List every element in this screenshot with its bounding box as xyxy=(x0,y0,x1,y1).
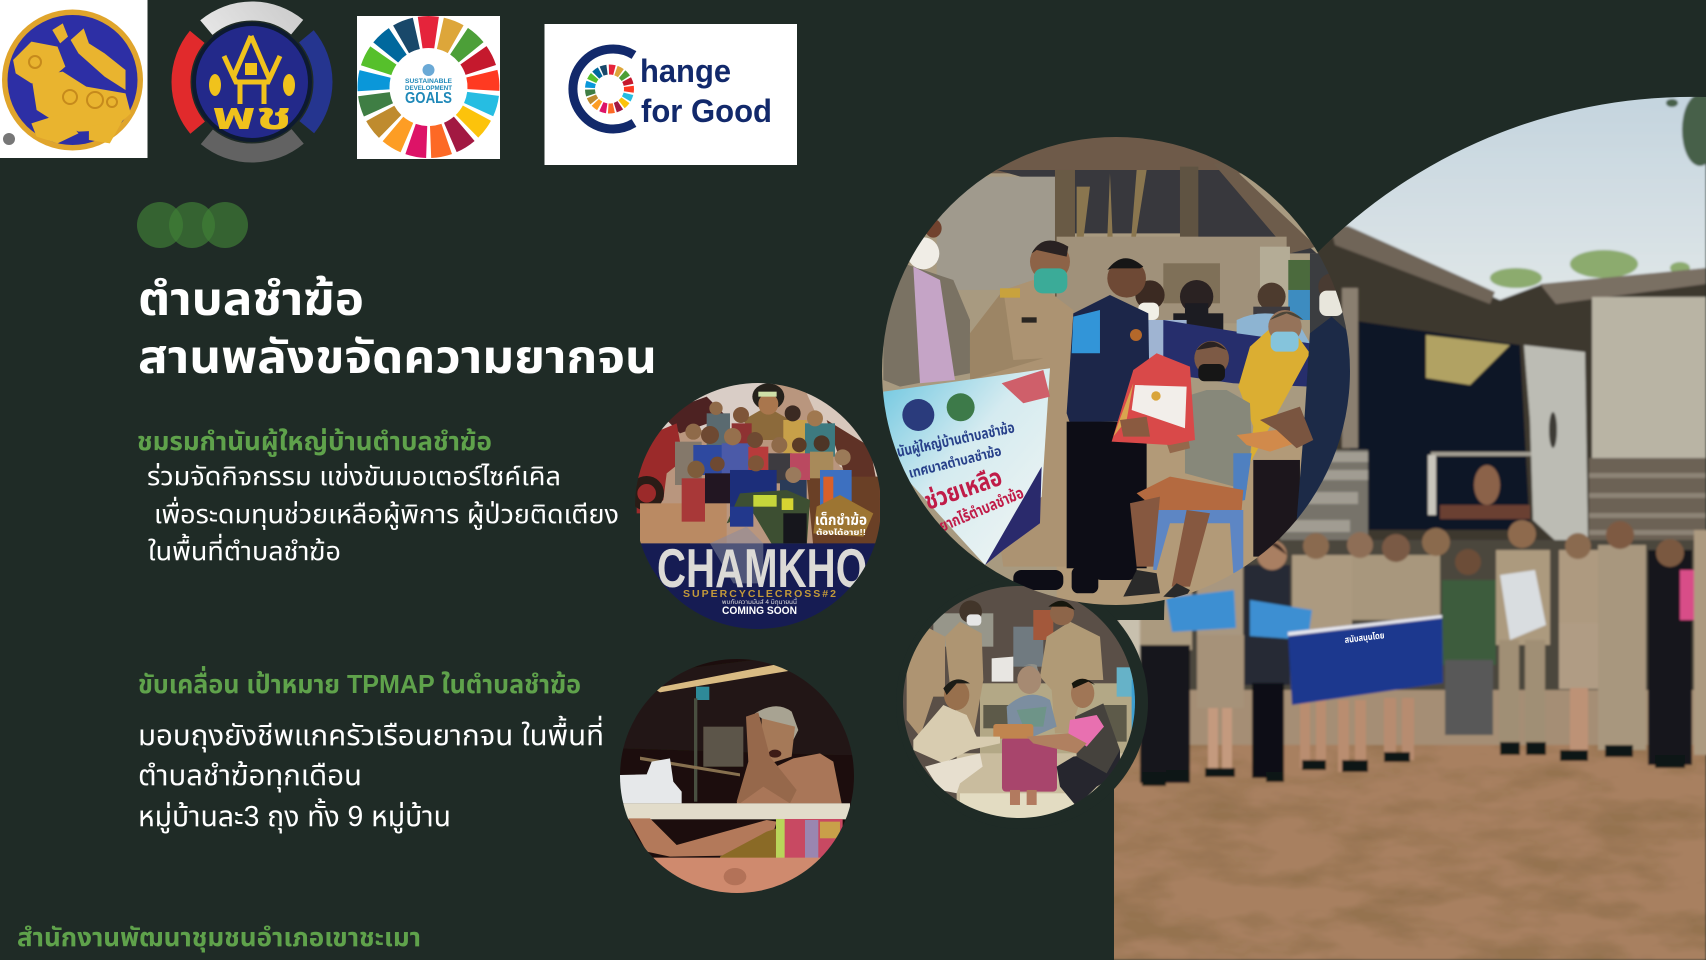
section 2 body text xyxy=(138,715,604,834)
photo: handing over food bag to seated villager: นันผู้ใหญ่บ้านตำบลชำฆ้อ xyxy=(895,418,1016,462)
logo: community development department: พช xyxy=(212,96,292,138)
three overlapping green circles xyxy=(137,202,248,248)
photo: large group of officials in front of the house: สนับสนุนโดย xyxy=(1344,630,1385,645)
photo: large group of officials in front of the house xyxy=(1100,80,1706,960)
logo: community development department xyxy=(152,0,352,182)
tree foliage top right xyxy=(1666,94,1706,166)
section 2 body text: มอบถุงยังชีพแกครัวเรือนยากจน ในพื้นที่ xyxy=(138,715,604,752)
section 1 body text: ในพื้นที่ตำบลชำฆ้อ xyxy=(148,533,341,566)
photo: motorcycle event poster: CHAMKHO xyxy=(657,537,867,599)
blue hand signs xyxy=(1166,590,1236,632)
photo: motorcycle event poster: พบกับความมันส์ 4 มิถุนายนนี้ xyxy=(722,597,797,607)
title: ตำบลชำฆ้อ xyxy=(138,273,364,325)
section 2 heading: ขับเคลื่อน เป้าหมาย TPMAP ในตำบลชำฆ้อ xyxy=(138,666,581,699)
section 1 body text xyxy=(147,461,619,566)
title xyxy=(138,273,657,383)
section 1 heading: ชมรมกำนันผู้ใหญ่บ้านตำบลชำฆ้อ xyxy=(137,426,492,457)
section 1 body text: เพื่อระดมทุนช่วยเหลือผู้พิการ ผู้ป่วยติดเตียง xyxy=(154,496,619,530)
section 1 body text: ร่วมจัดกิจกรรม แข่งขันมอเตอร์ไซค์เคิล xyxy=(147,461,561,491)
photo: motorcycle event poster: ต้องได้อาย!! xyxy=(816,527,866,537)
logo: provincial seal xyxy=(0,0,148,158)
logo: change for good xyxy=(544,24,797,165)
logo: change for good: for Good xyxy=(641,93,772,129)
photo: handing over food bag to seated villager: เทศบาลตำบลชำฆ้อ xyxy=(907,442,1003,481)
logo: change for good: hange xyxy=(640,53,731,89)
logo: sustainable development goals wheel: GOALS xyxy=(405,90,452,107)
row of officials xyxy=(1118,513,1706,786)
logo: sustainable development goals wheel: SUSTAINABLE xyxy=(405,78,453,85)
logo: sustainable development goals wheel: DEVELOPMENT xyxy=(405,85,452,92)
section 2 body text: หมู่บ้านละ3 ถุง ทั้ง 9 หมู่บ้าน xyxy=(138,798,451,834)
photo: handing over food bag to seated villager: ช่วยเหลือ xyxy=(921,463,1006,516)
title: สานพลังขจัดความยากจน xyxy=(138,331,657,383)
shoes xyxy=(1142,742,1685,786)
photo: motorcycle event poster: COMING SOON xyxy=(722,605,797,617)
photo: motorcycle event poster: SUPERCYCLECROSS#2 xyxy=(683,588,836,600)
photo: officials with elderly woman, dark ring xyxy=(903,586,1148,818)
logo: sustainable development goals wheel xyxy=(351,9,506,165)
photo: handing over food bag to seated villager xyxy=(882,137,1350,605)
photo: motorcycle event poster xyxy=(633,380,880,630)
photo: handing over food bag to seated villager: ยากไร้ตำบลชำฆ้อ xyxy=(937,484,1026,536)
photo: motorcycle event poster: เด็กชำฆ้อ xyxy=(815,511,867,529)
photo: elderly man at home xyxy=(620,655,860,895)
footer organisation name: สำนักงานพัฒนาชุมชนอำเภอเขาชะเมา xyxy=(17,922,421,953)
section 2 body text: ตำบลชำฆ้อทุกเดือน xyxy=(138,760,362,792)
banner held by the group xyxy=(1288,615,1443,705)
